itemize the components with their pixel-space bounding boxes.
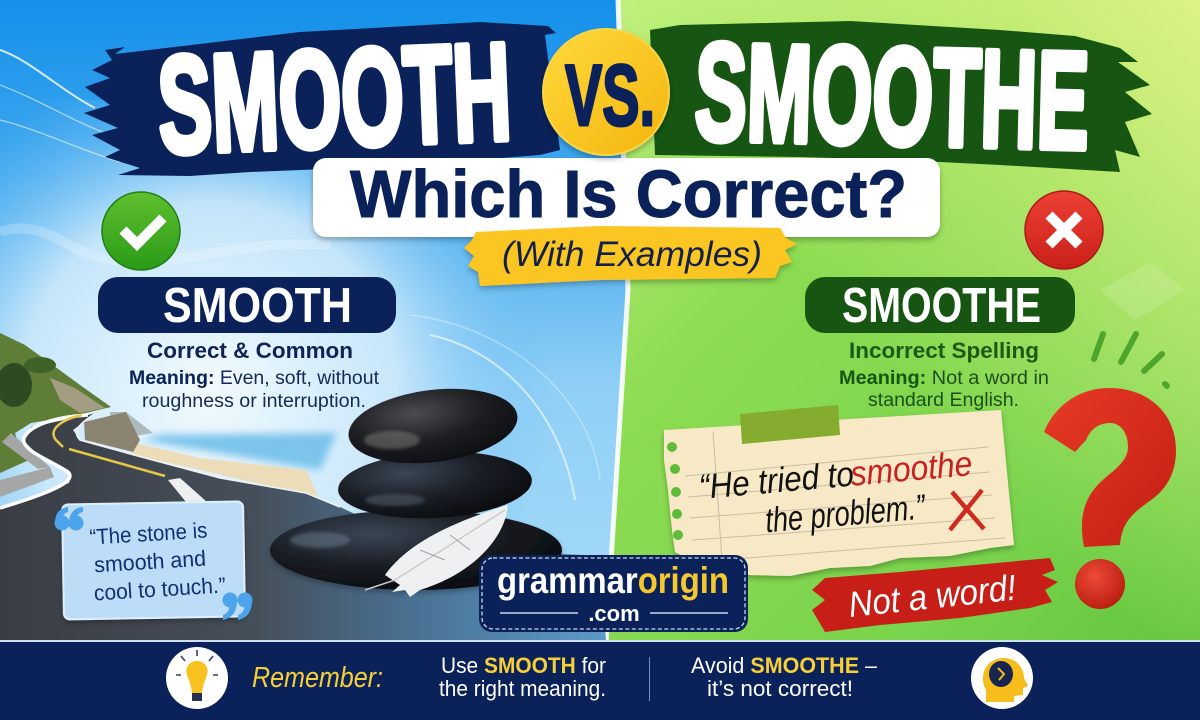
tip: use smooth: the right meaning. (439, 676, 606, 701)
logo badge: .com (588, 601, 640, 626)
pill: SMOOTH (98, 277, 396, 333)
red x (950, 490, 984, 530)
roadside rocks (84, 412, 140, 452)
left text block: Meaning: Even, soft, without (129, 368, 380, 389)
note text: the problem.” (764, 487, 927, 540)
tip: avoid smoothe (691, 653, 878, 701)
beach (122, 440, 318, 497)
distant sea (142, 433, 337, 470)
red brush: not a word (812, 558, 1058, 632)
panel: green right background (606, 0, 1200, 642)
quote mark close (222, 592, 252, 620)
VS badge: VS. (565, 48, 655, 144)
left text block: roughness or interruption. (142, 391, 366, 412)
yellow brush banner (464, 226, 797, 286)
road scene (0, 333, 606, 641)
title brush: green (650, 21, 1152, 172)
asphalt (0, 413, 606, 641)
hillside (0, 333, 111, 473)
left text block: Correct & Common (147, 338, 353, 363)
panel: blue left background (0, 0, 640, 642)
quote mark open (54, 507, 84, 530)
tape (740, 405, 840, 444)
tip: use smooth (439, 653, 606, 701)
icon: green check (102, 192, 180, 270)
subtitle: Which Is Correct? (350, 157, 907, 232)
logo badge (479, 555, 748, 632)
white subtitle box (313, 157, 940, 237)
note paper (664, 405, 1014, 576)
pill: SMOOTHE: SMOOTHE (842, 279, 1041, 333)
icon: question mark (1044, 388, 1176, 609)
right text block (839, 338, 1049, 411)
example card: stone: cool to touch.” (93, 572, 226, 605)
left text block (129, 338, 380, 412)
icon: light bulb (166, 647, 228, 709)
right text block: Meaning: Not a word in (839, 368, 1049, 389)
note text: “He tried to (697, 455, 855, 507)
emphasis ticks (1094, 334, 1167, 386)
right text block: Incorrect Spelling (849, 338, 1039, 363)
tip: avoid smoothe: Avoid SMOOTHE – (691, 653, 878, 678)
title brush: navy (84, 22, 560, 176)
pill: SMOOTH: SMOOTH (163, 279, 352, 333)
example card: stone: “The stone is (89, 517, 208, 550)
remember label: Remember: (252, 662, 383, 694)
example card: stone: smooth and (93, 546, 207, 577)
note text: smoothe (849, 444, 974, 494)
title word: SMOOTH: SMOOTH (155, 15, 514, 183)
stones stack (270, 380, 562, 590)
logo badge: grammarorigin (497, 560, 729, 601)
icon: red cross (1025, 191, 1103, 269)
tip: use smooth: Use SMOOTH for (441, 653, 606, 678)
right text block: standard English. (868, 390, 1019, 411)
tip: avoid smoothe: it’s not correct! (707, 676, 853, 701)
icon: head (971, 647, 1033, 709)
VS badge (543, 29, 669, 155)
guard rail (0, 467, 54, 497)
bottom band (0, 640, 1200, 720)
red brush: not a word: Not a word! (847, 567, 1018, 625)
yellow brush banner: (With Examples) (502, 235, 762, 274)
road lines (0, 415, 88, 508)
note text (697, 444, 977, 546)
feather (365, 505, 508, 597)
example card: stone (54, 501, 252, 620)
misty headland (110, 412, 153, 440)
